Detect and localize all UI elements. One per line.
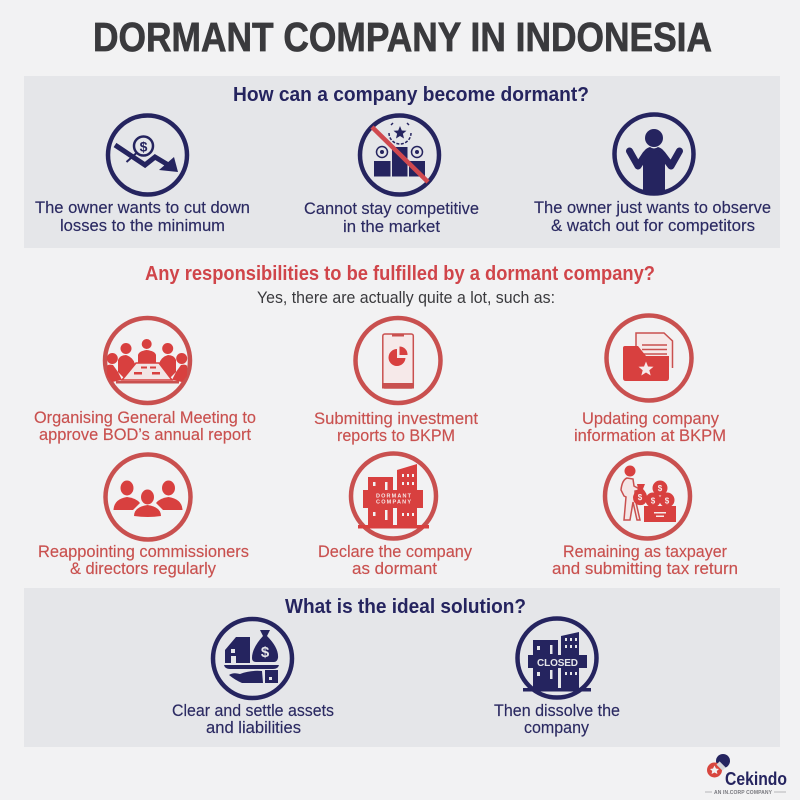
icon: closed building [518, 618, 596, 698]
text: cannot stay competitive [304, 200, 479, 236]
icon: taxpayer with money bags: $ [658, 484, 663, 493]
icon: assets on a hand: $ [261, 644, 270, 661]
text: investment reports [314, 410, 478, 445]
text: observe competitors [534, 199, 771, 235]
text: reappointing commissioners: Reappointing commissioners [38, 543, 249, 561]
icon: taxpayer with money bags: $ [638, 493, 643, 502]
text: clear and settle [172, 702, 334, 737]
panel: ideal solution [24, 588, 780, 747]
text: remaining as taxpayer [552, 543, 738, 578]
icon: taxpayer with money bags: $ [651, 496, 656, 506]
icon: taxpayer with money bags [605, 454, 690, 538]
text: reappointing commissioners [38, 543, 249, 578]
icon: dormant company building [351, 454, 436, 538]
text: organising general meeting: approve BOD’s annual report [39, 426, 251, 444]
icon: dormant company building: COMPANY [376, 500, 411, 506]
logo: Cekindo: AN IN.CORP COMPANY [714, 790, 773, 796]
icon: podium crossed out [360, 116, 439, 194]
text: observe competitors: & watch out for competitors [551, 217, 755, 235]
text: dissolve the company: Then dissolve the [494, 702, 620, 720]
text: investment reports: Submitting investment [314, 410, 478, 428]
icon: falling chart with magnifier [108, 116, 187, 194]
text: dissolve the company: company [524, 719, 590, 737]
text: observe competitors: The owner just wants to observe [534, 199, 771, 217]
title: DORMANT COMPANY IN INDONESIA [93, 14, 712, 60]
text: cut down losses [35, 199, 250, 235]
icon: phone with pie chart [356, 318, 440, 403]
text: cut down losses: The owner wants to cut down [35, 199, 250, 217]
text: organising general meeting: Organising General Meeting to [34, 409, 256, 427]
text: declare dormant: as dormant [352, 560, 437, 578]
heading: how can a company become dormant: How can a company become dormant? [233, 84, 589, 106]
text: updating company information: information at BKPM [574, 427, 726, 445]
icon: closed building: CLOSED [537, 658, 578, 669]
icon: person shrugging [614, 114, 694, 194]
logo: Cekindo [705, 754, 787, 796]
text: clear and settle: Clear and settle assets [172, 702, 334, 720]
icon: assets on a hand [213, 619, 292, 698]
heading: responsibilities: Any responsibilities to be fulfilled by a dormant company? [145, 263, 655, 285]
text: cannot stay competitive: in the market [343, 218, 440, 236]
subheading: yes there are quite a lot: Yes, there are actually quite a lot, such as: [257, 289, 555, 307]
icon: folder with star [606, 316, 692, 400]
icon: three directors [106, 454, 190, 540]
text: clear and settle: and liabilities [206, 719, 301, 737]
logo: Cekindo: Cekindo [725, 769, 787, 789]
text: dissolve the company [494, 702, 620, 737]
text: cut down losses: losses to the minimum [60, 217, 225, 235]
icon: taxpayer with money bags: $ [665, 496, 670, 506]
panel: how can a company become dormant [24, 76, 780, 248]
text: remaining as taxpayer: and submitting tax return [552, 560, 738, 578]
icon: falling chart with magnifier: $ [140, 138, 148, 154]
text: updating company information [574, 410, 726, 445]
text: updating company information: Updating company [582, 410, 720, 428]
text: cannot stay competitive: Cannot stay competitive [304, 200, 479, 218]
text: remaining as taxpayer: Remaining as taxpayer [563, 543, 727, 561]
text: investment reports: reports to BKPM [337, 427, 455, 445]
text: reappointing commissioners: & directors regularly [70, 560, 217, 578]
icon: general meeting [105, 318, 190, 403]
text: declare dormant: Declare the company [318, 543, 473, 561]
text: organising general meeting [34, 409, 256, 444]
text: declare dormant [318, 543, 473, 578]
heading: ideal solution: What is the ideal solution? [285, 596, 526, 618]
icon: dormant company building: DORMANT [376, 494, 412, 500]
